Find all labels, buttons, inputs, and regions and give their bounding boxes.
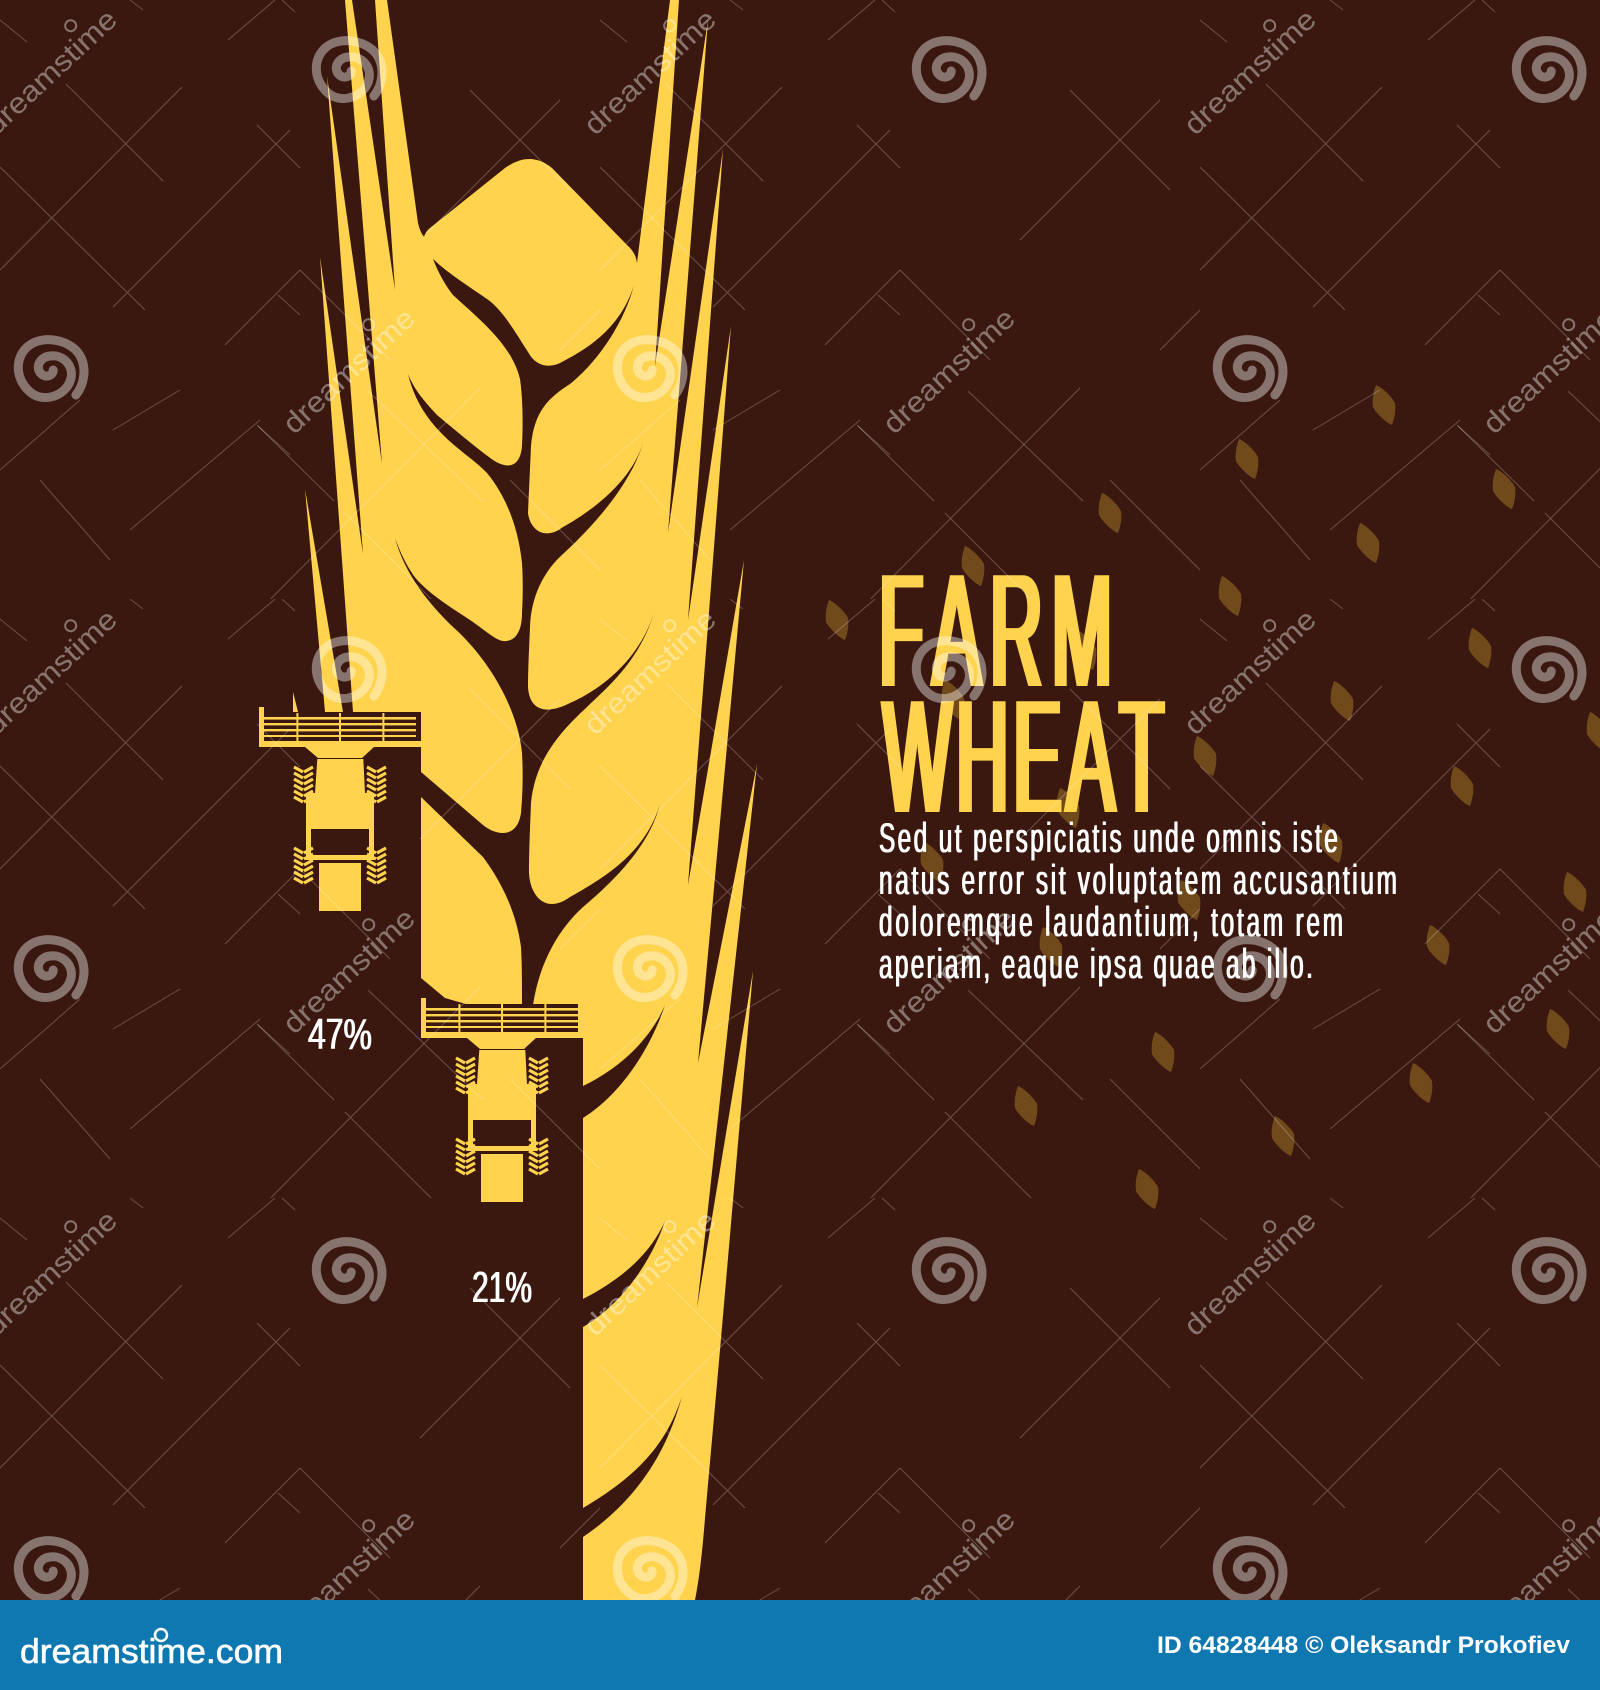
label: 21%: 21% xyxy=(472,1263,532,1312)
wheat stem and grain separators xyxy=(395,259,660,1005)
body text: natus error sit voluptatem accusantium xyxy=(879,857,1397,904)
icon: harvester 1 xyxy=(259,707,421,911)
footer bar xyxy=(0,1600,1600,1690)
wheat silhouette with awns xyxy=(293,0,757,1600)
wheat ear illustration xyxy=(293,0,757,1600)
falling wheat seeds xyxy=(826,385,1600,1209)
lower grain cut 1 xyxy=(583,1005,665,1118)
title xyxy=(879,542,1164,847)
body text xyxy=(879,815,1397,988)
footer logo text: dreamstime.com xyxy=(20,1633,283,1671)
title: FARM xyxy=(879,542,1112,721)
image credit: ID 64828448 © Oleksandr Prokofiev xyxy=(1157,1632,1571,1659)
footer logo spiral xyxy=(155,1629,167,1641)
lower grain cut 2 xyxy=(583,1221,665,1327)
body text: aperiam, eaque ipsa quae ab illo. xyxy=(879,941,1313,988)
label: 47%: 47% xyxy=(308,1010,372,1059)
body text: Sed ut perspiciatis unde omnis iste xyxy=(879,815,1338,862)
body text: doloremque laudantium, totam rem xyxy=(879,899,1343,946)
title: WHEAT xyxy=(883,668,1164,847)
lower grain cut 3 xyxy=(583,1396,682,1537)
icon: harvester 2 xyxy=(421,998,583,1202)
